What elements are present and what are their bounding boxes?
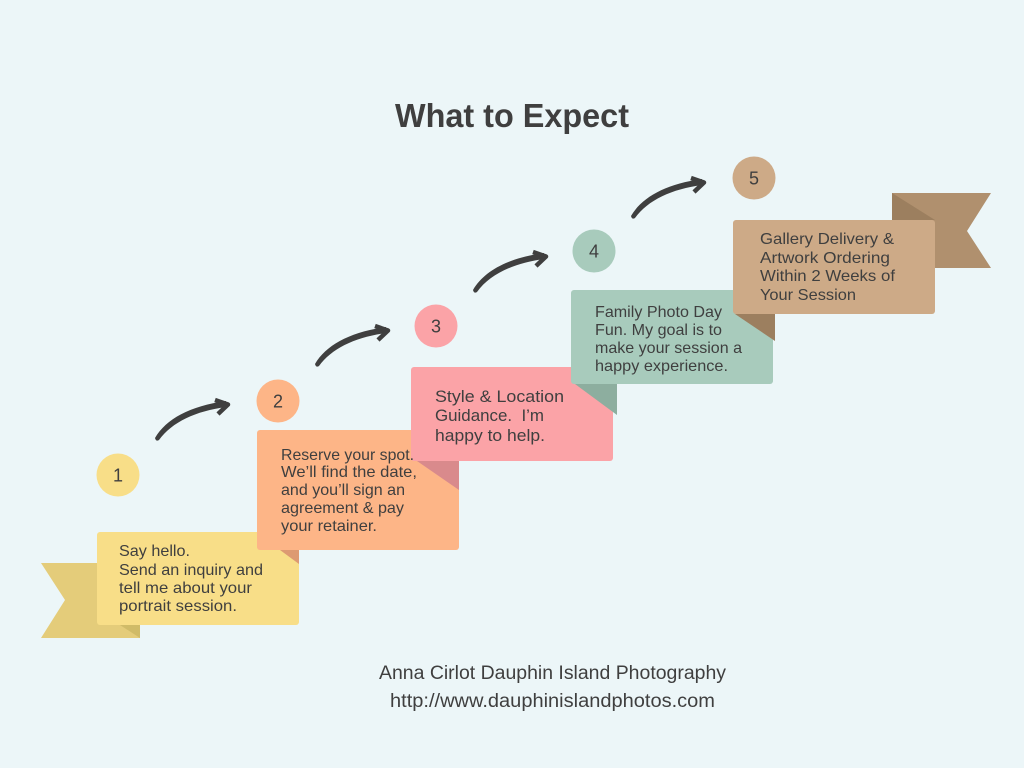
step 4 text bbox=[595, 304, 742, 375]
footer credit: Anna Cirlot Dauphin Island Photography bbox=[379, 663, 726, 684]
title: What to Expect bbox=[395, 97, 629, 134]
badge: step 2 bbox=[256, 380, 300, 422]
step 4 text: Fun. My goal is to bbox=[595, 322, 722, 339]
step 3 text bbox=[435, 387, 564, 445]
badge: step 3 bbox=[414, 304, 458, 348]
step 2 text: and you’ll sign an bbox=[281, 482, 405, 499]
step 5 text bbox=[760, 231, 896, 304]
step 3 text: happy to help. bbox=[435, 426, 545, 445]
step 2 text: We’ll find the date, bbox=[281, 464, 417, 481]
step 5 text: Your Session bbox=[760, 287, 856, 304]
step 2 text: Reserve your spot. bbox=[281, 447, 414, 464]
step 1 text: tell me about your bbox=[119, 580, 253, 597]
fold: step 3 shadow bbox=[417, 461, 459, 490]
arrow: step 4 to 5 bbox=[631, 178, 704, 219]
step 5 text: Artwork Ordering bbox=[760, 250, 890, 267]
step 4 text: Family Photo Day bbox=[595, 304, 722, 321]
badge: step 2: 2 bbox=[273, 392, 283, 412]
fold: step 4 shadow bbox=[575, 384, 617, 415]
step 1 text bbox=[119, 543, 263, 615]
step 2 text bbox=[281, 447, 417, 535]
step 1 text: Say hello. bbox=[119, 543, 190, 560]
fold: step 2 shadow bbox=[280, 550, 299, 564]
badge: step 5: 5 bbox=[749, 168, 759, 188]
fold: step 5 shadow bbox=[735, 314, 775, 341]
arrow: step 3 to 4 bbox=[473, 252, 546, 293]
step 5 text: Within 2 Weeks of bbox=[760, 268, 896, 285]
badge: step 4: 4 bbox=[589, 242, 599, 262]
badge: step 3: 3 bbox=[431, 316, 441, 336]
badge: step 1: 1 bbox=[113, 466, 123, 486]
step 5 text: Gallery Delivery & bbox=[760, 231, 894, 248]
step 1 text: portrait session. bbox=[119, 598, 237, 615]
footer credit bbox=[379, 663, 726, 712]
step 4 text: happy experience. bbox=[595, 358, 728, 375]
step 4 text: make your session a bbox=[595, 340, 742, 357]
arrow: step 1 to 2 bbox=[155, 400, 228, 441]
step 2 text: your retainer. bbox=[281, 518, 377, 535]
arrow: step 2 to 3 bbox=[315, 326, 388, 367]
step 3 text: Style & Location bbox=[435, 387, 564, 406]
footer credit: http://www.dauphinislandphotos.com bbox=[390, 691, 715, 712]
panel: step 1 bbox=[97, 532, 299, 625]
step 3 text: Guidance. I’m bbox=[435, 406, 544, 425]
panel: step 4 bbox=[571, 290, 773, 384]
panel: step 2 bbox=[257, 430, 459, 550]
badge: step 5 bbox=[732, 156, 776, 200]
ribbon: step 1 bbox=[41, 563, 140, 638]
badge: step 1 bbox=[96, 454, 140, 496]
panel: step 3 bbox=[411, 367, 613, 461]
panel: step 5 bbox=[733, 220, 935, 314]
badge: step 4 bbox=[572, 230, 616, 272]
ribbon: step 5 bbox=[892, 193, 991, 268]
step 1 text: Send an inquiry and bbox=[119, 562, 263, 579]
step 2 text: agreement & pay bbox=[281, 500, 404, 517]
